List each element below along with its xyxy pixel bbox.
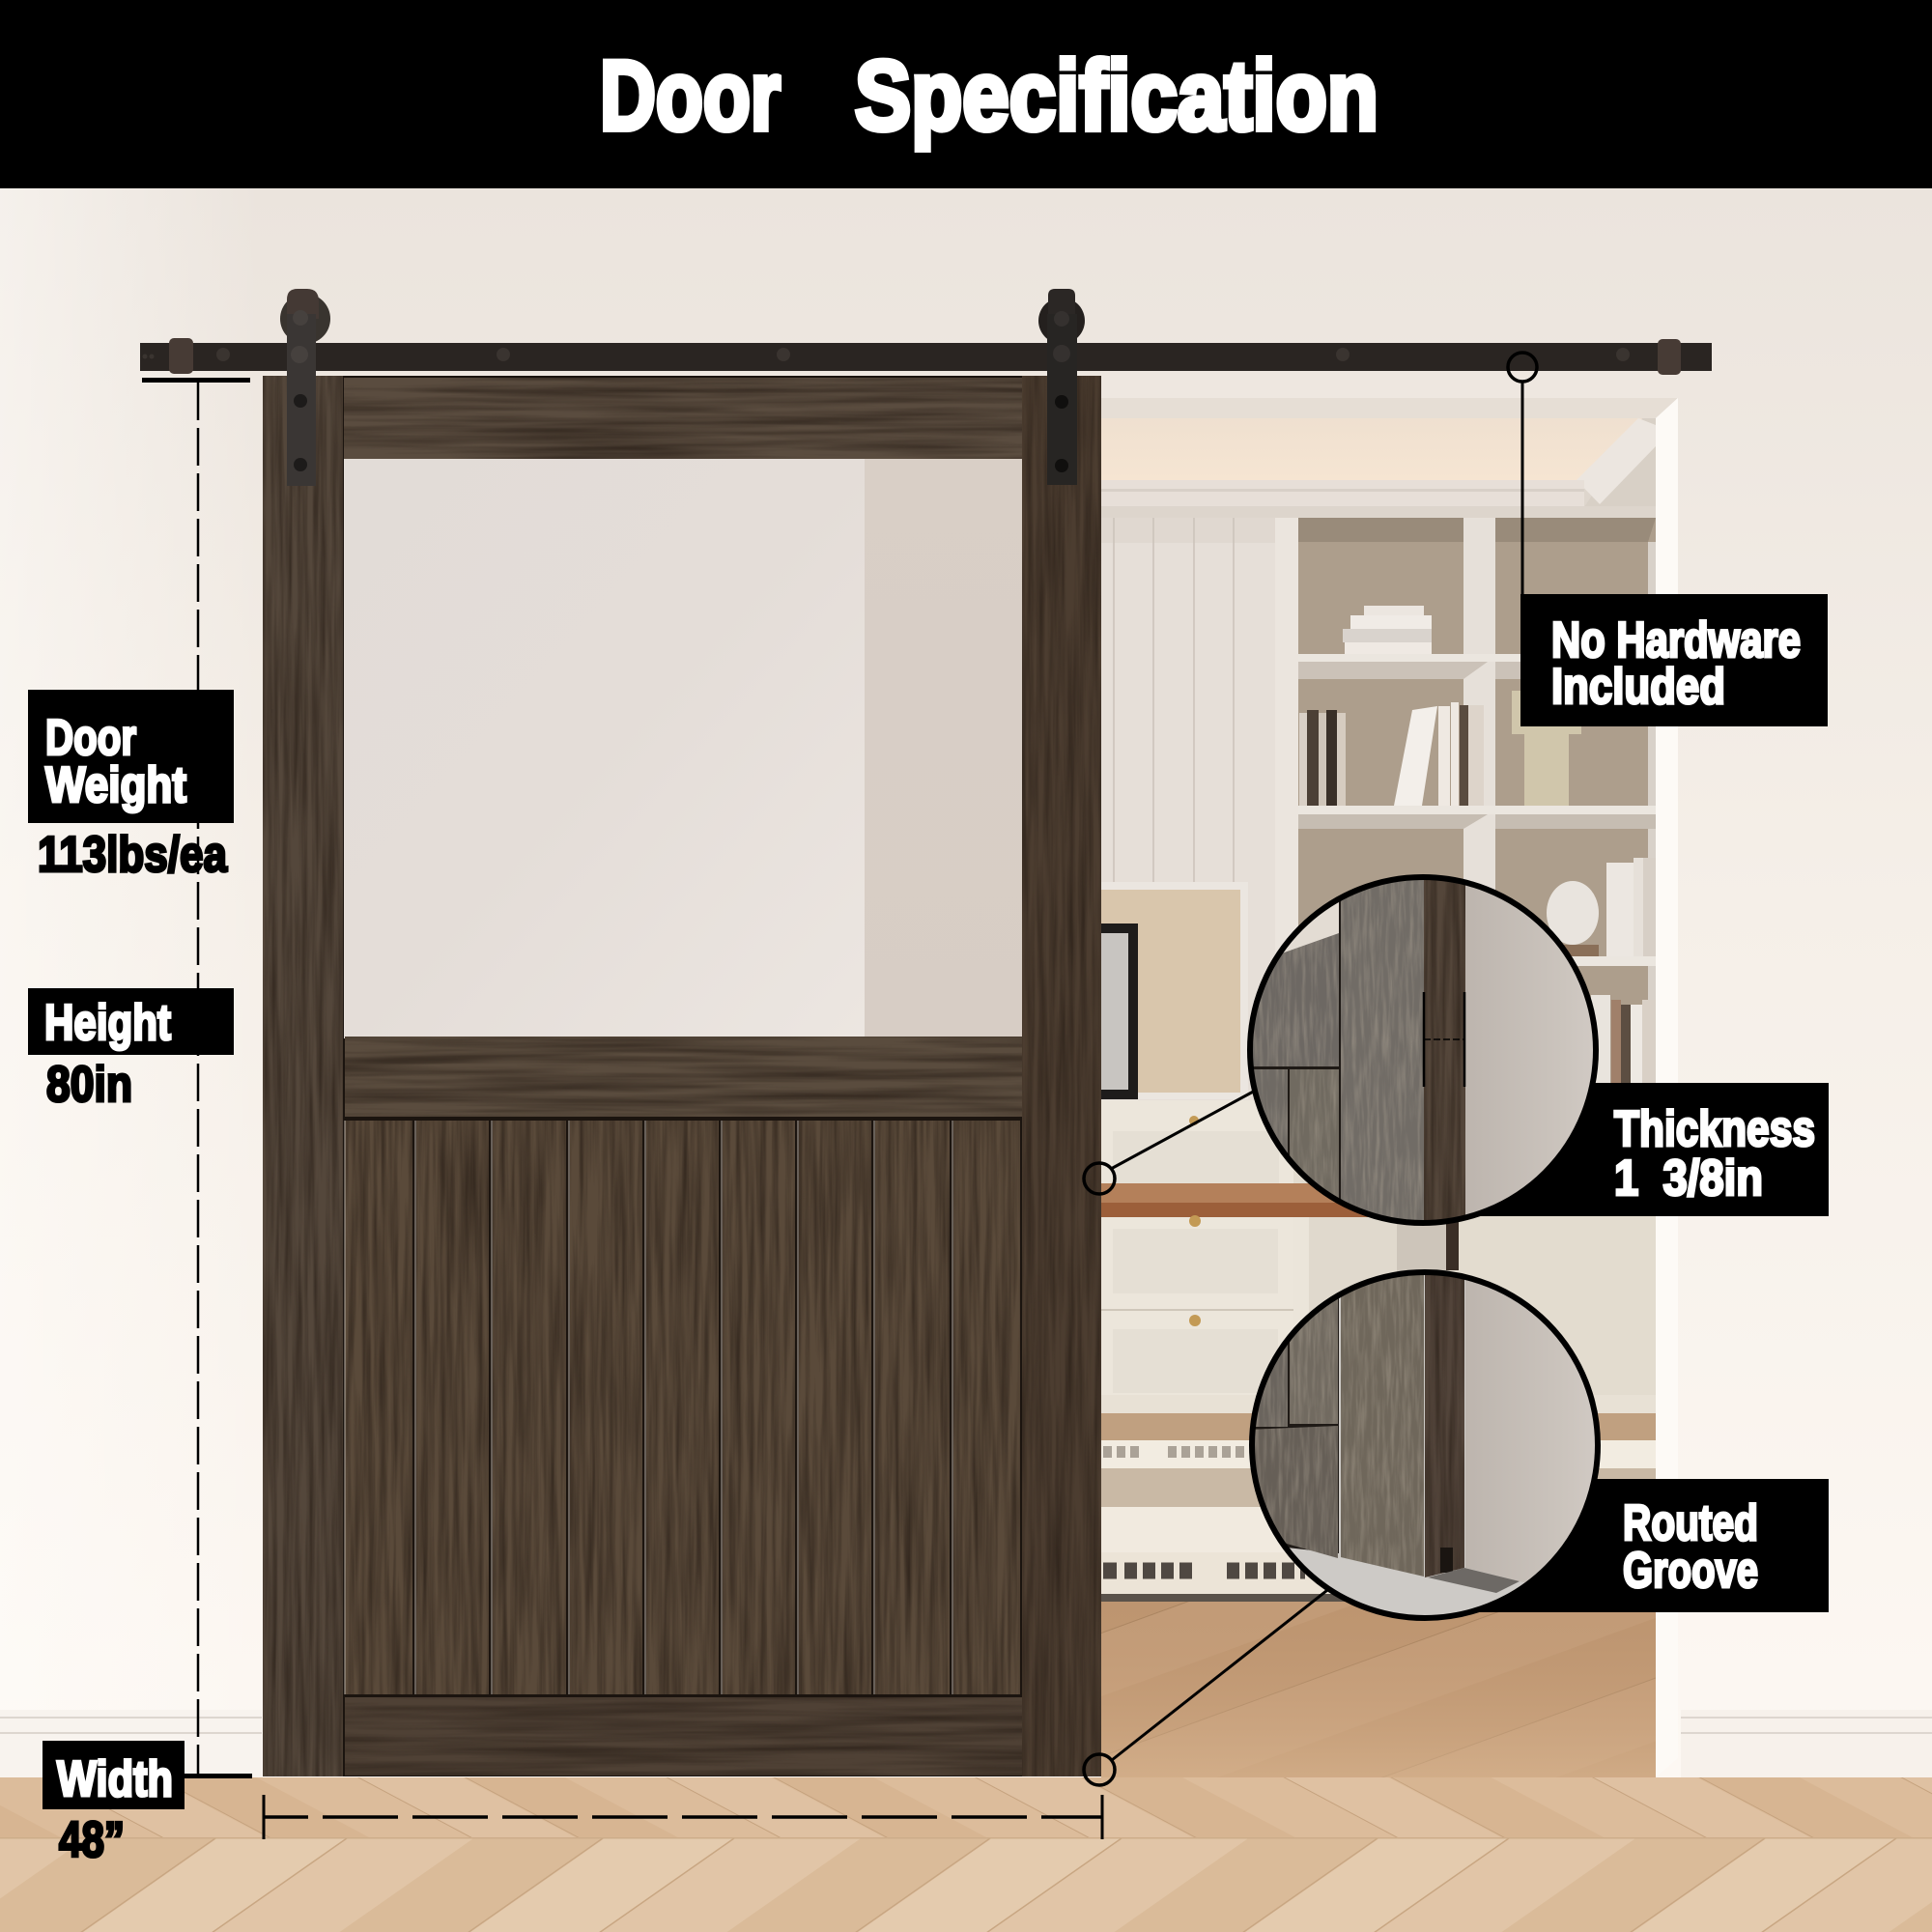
height label: [28, 988, 234, 1055]
width dimension line: [264, 1795, 1102, 1839]
upright books: [1299, 702, 1484, 806]
title text second word: Specification: [855, 41, 1378, 151]
no hardware callout: [1508, 353, 1828, 726]
height value: 80in: [46, 1057, 132, 1113]
stacked books: [1343, 606, 1432, 654]
black track rail with hangers: [140, 289, 1712, 486]
routed groove callout label: Groove: [1623, 1543, 1758, 1599]
no hardware callout: Included: [1551, 659, 1725, 715]
thickness callout label: [1084, 1083, 1829, 1216]
routed groove callout label: [1084, 1479, 1829, 1785]
title text: Door: [600, 41, 781, 151]
weight value: 113lbs/ea: [38, 827, 228, 883]
right hanger: [1038, 289, 1085, 485]
title bar: [0, 0, 1932, 188]
thickness callout label: Thickness: [1614, 1101, 1815, 1157]
plank highlights: [345, 1121, 952, 1694]
ceiling soffit and cove light: [1101, 398, 1678, 518]
bottom rail: [345, 1697, 1022, 1776]
shelves: [1298, 654, 1656, 966]
width label: [43, 1741, 252, 1809]
rail bolts: [143, 348, 1630, 361]
end stops: [169, 338, 1681, 375]
thickness callout label: 1 3/8in: [1614, 1151, 1763, 1207]
thickness detail circle: [1246, 869, 1605, 1231]
view through doorway: study room: [1101, 398, 1678, 1777]
height label: Height: [44, 995, 171, 1051]
glass panel: [344, 459, 1022, 1038]
framed art: [1101, 882, 1248, 1099]
white panelled wall: [1101, 518, 1277, 1175]
door weight label: [28, 690, 234, 823]
cabinet, desk, drawers: [1101, 1100, 1665, 1420]
vase and books: [1547, 858, 1656, 1084]
height dimension line: [142, 378, 250, 1776]
bookshelf: [1275, 518, 1656, 1175]
rail bar: [140, 343, 1712, 371]
left stile: [263, 376, 343, 1776]
baseboards: [0, 1710, 1932, 1777]
door weight label: Weight: [45, 757, 186, 813]
sliding barn door: [263, 376, 1101, 1776]
routed groove detail circle: [1246, 1265, 1608, 1623]
right stile: [1022, 376, 1101, 1776]
top rail: [344, 378, 1022, 459]
doorway trim: [1656, 398, 1678, 1777]
vertical planks: [345, 1121, 1020, 1694]
no hardware callout: No Hardware: [1551, 612, 1801, 668]
sculpture: [1512, 691, 1581, 806]
rug and floor: [1101, 1413, 1656, 1777]
middle rail: [345, 1037, 1022, 1117]
width label: Width: [57, 1751, 173, 1807]
door weight label: Door: [45, 710, 136, 766]
foreground herringbone floor: [0, 1777, 1932, 1932]
width value: 48”: [59, 1812, 125, 1868]
left hanger: [280, 289, 330, 486]
routed groove callout label: Routed: [1623, 1495, 1758, 1551]
